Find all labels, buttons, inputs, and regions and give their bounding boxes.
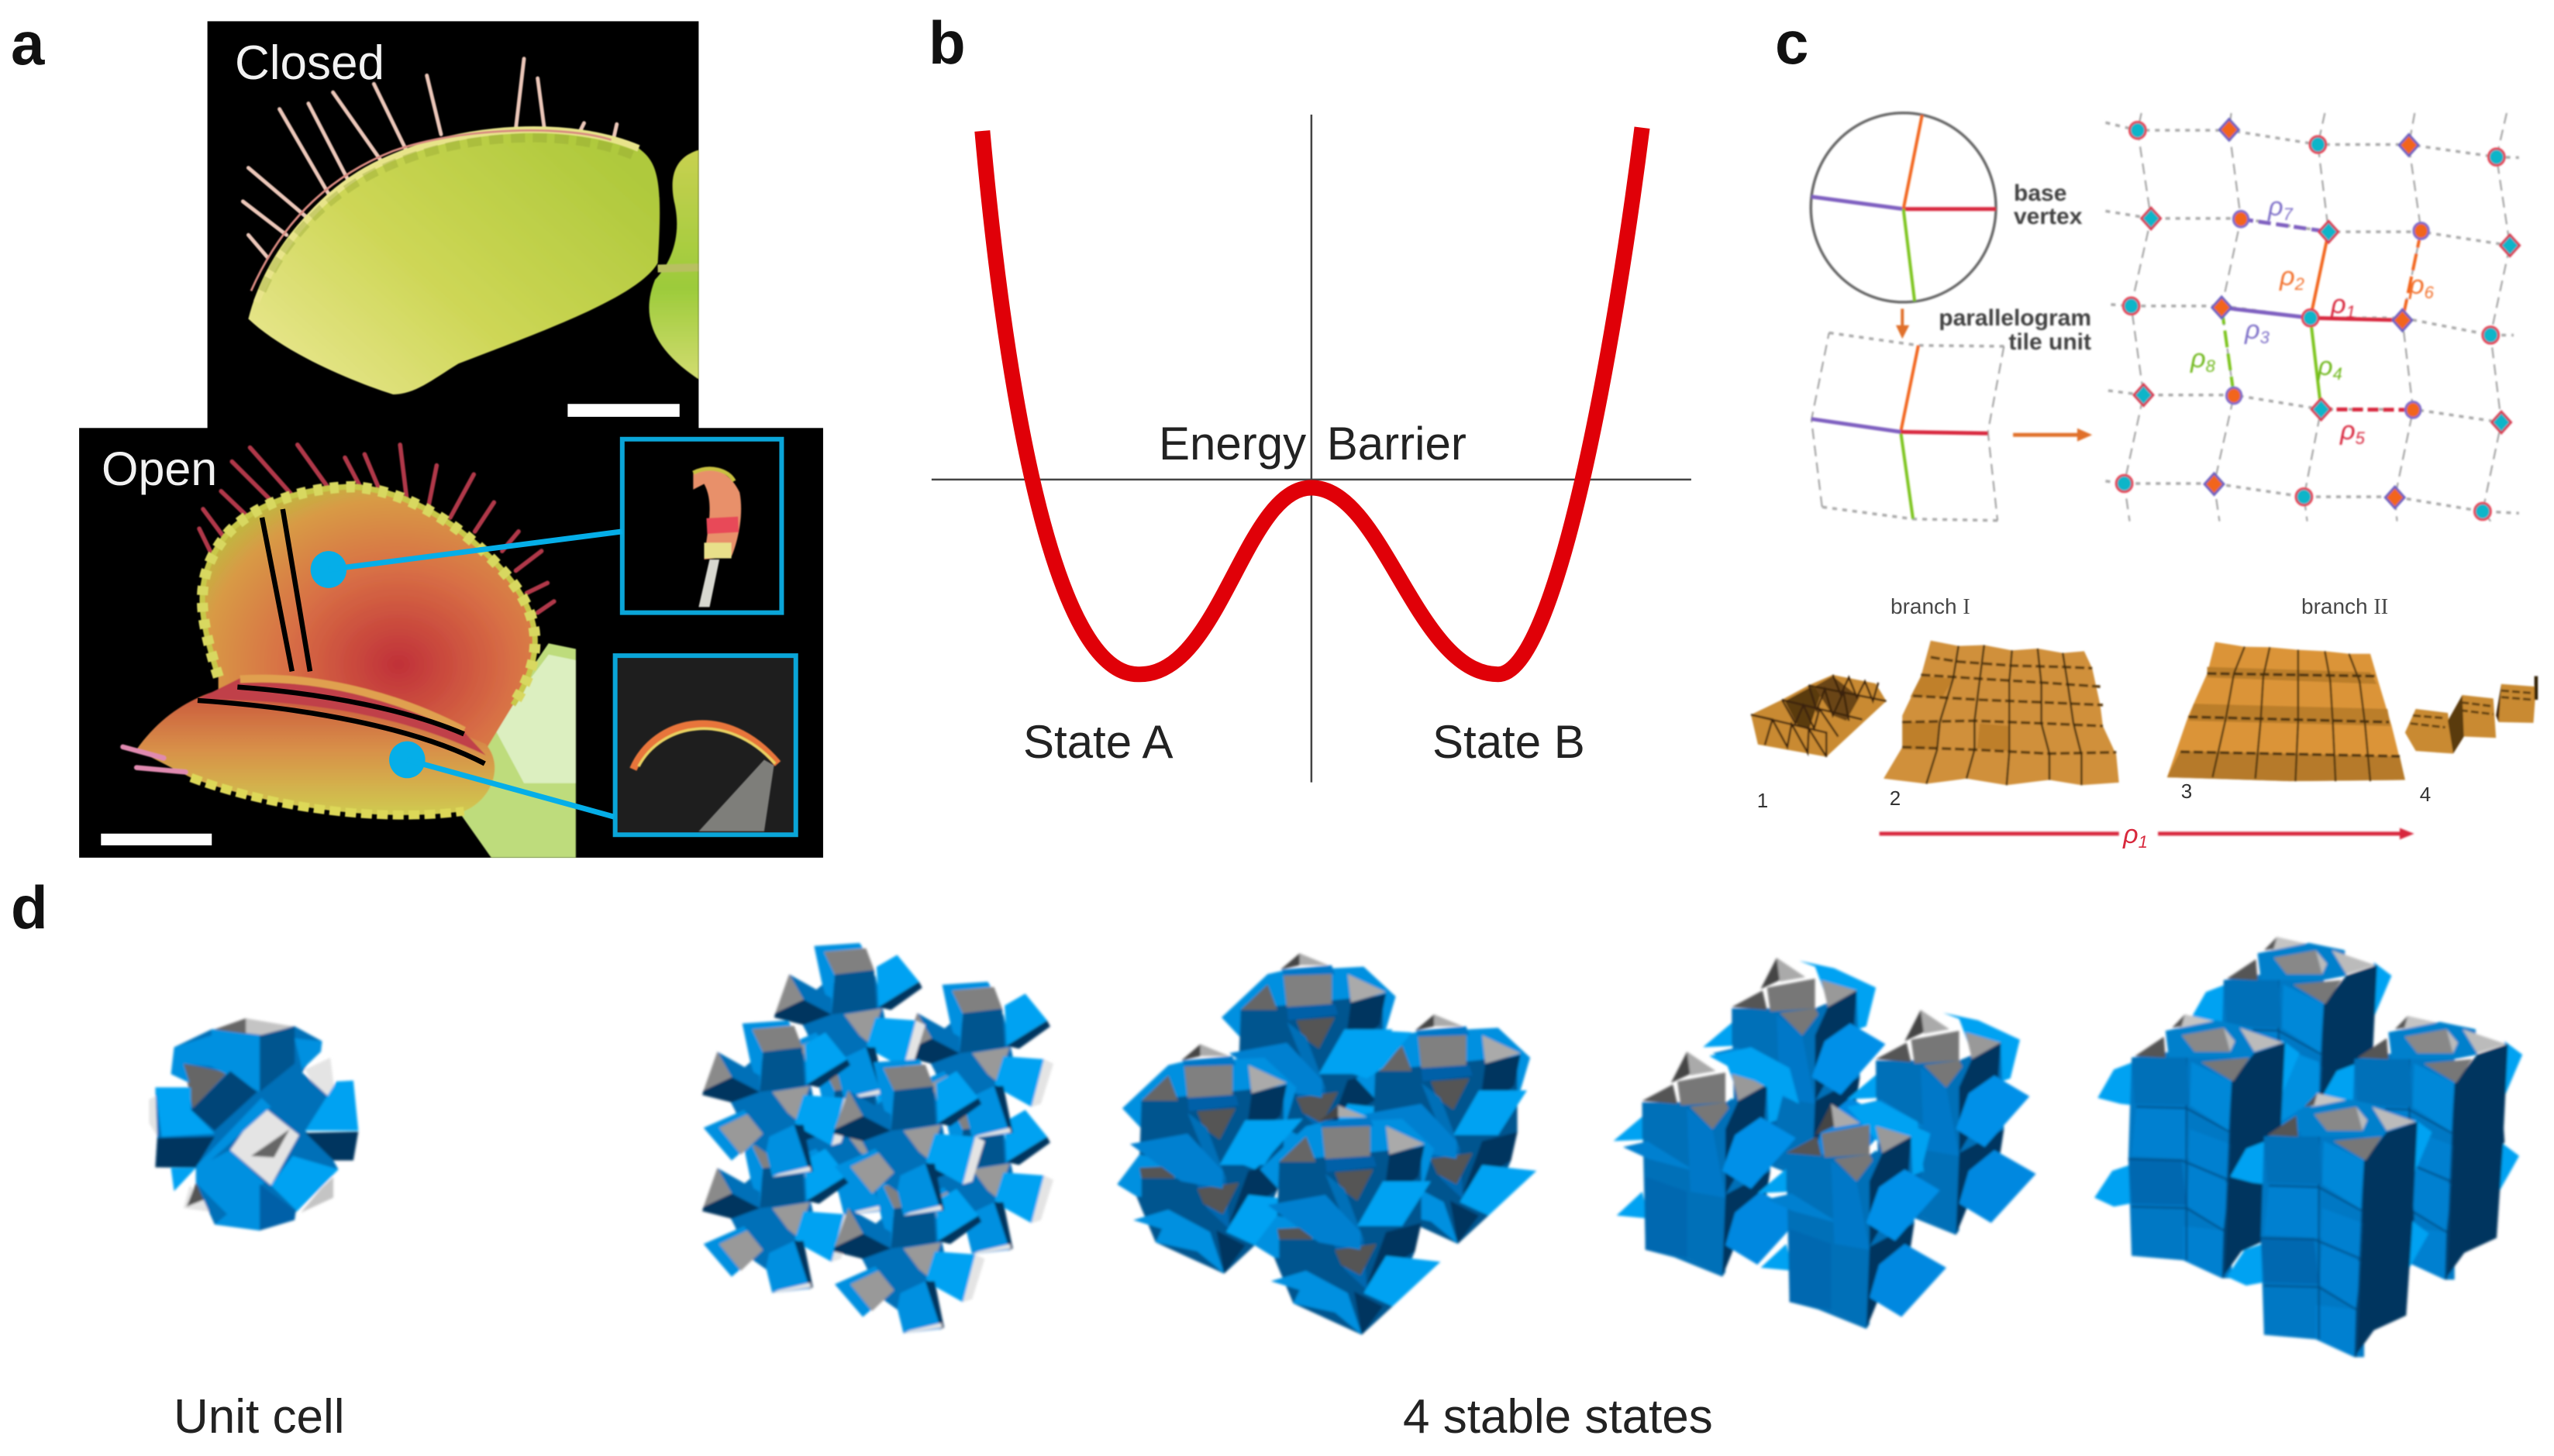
label: Energy Barrier: Energy Barrier (1159, 418, 1467, 470)
label: Closed: Closed (235, 36, 384, 90)
state 4: compact lattice (2094, 937, 2522, 1357)
panel c: base vertex and tessellation (1751, 113, 2536, 839)
lattice parameter labels: 1 (2346, 302, 2356, 322)
callout: blue pointer to upper inset (311, 532, 622, 588)
lattice parameter labels: 5 (2356, 429, 2366, 448)
panel label: c: c (1775, 9, 1808, 77)
label: rho1: 1 (2139, 832, 2148, 852)
lattice parameter labels: ρ (2331, 290, 2346, 319)
state 3: lattice (1613, 958, 2036, 1329)
label: rho1: ρ (2123, 820, 2139, 849)
label: parallelogram tile unit: tile unit (2008, 329, 2091, 355)
axes (932, 115, 1691, 783)
lattice parameter labels: ρ (2340, 416, 2356, 446)
unit cell (149, 1018, 358, 1231)
arrow: circle to tile (1896, 308, 1909, 339)
lattice parameter labels: ρ (2280, 262, 2295, 291)
diagram: parallelogram tile unit (1811, 332, 2004, 521)
panel d: origami metamaterial (149, 937, 2522, 1357)
panel a: venus flytrap photographs (79, 21, 823, 858)
lattice parameter labels: ρ (2268, 192, 2283, 222)
state 1: expanded lattice (702, 943, 1053, 1334)
lattice parameter labels: ρ (2245, 315, 2260, 345)
callout: blue pointer to lower inset (389, 742, 614, 817)
lattice parameter labels: 8 (2206, 356, 2216, 376)
lattice parameter labels: 4 (2333, 364, 2342, 384)
panel label: d: d (11, 873, 48, 941)
diagram: base vertex circle (1811, 113, 1996, 302)
lattice parameter labels: ρ (2409, 270, 2425, 300)
panel label: a: a (11, 9, 45, 77)
state number 1: 1 (1757, 789, 1768, 812)
lattice parameter labels (2190, 192, 2435, 448)
state number 2: 2 (1890, 787, 1901, 810)
panel label: b: b (929, 9, 966, 77)
lattice parameter labels: 3 (2260, 328, 2270, 347)
sheet 2: branch I unfolded state (1884, 641, 2119, 785)
label: 4 stable states: 4 stable states (1403, 1390, 1713, 1444)
scale bar (101, 834, 212, 845)
sheet 4: folded stair state (2405, 676, 2536, 754)
sheet 1: folded zigzag state (1751, 675, 1887, 757)
photo: closed flytrap (208, 21, 698, 429)
inset: curved cross-section of upper lobe (622, 439, 781, 613)
label: State B: State B (1432, 716, 1585, 768)
inset: curved cross-section of lower lobe (615, 656, 796, 835)
label: base vertex: vertex (2014, 204, 2083, 229)
state number 3: 3 (2181, 780, 2192, 803)
state 2: lattice (1117, 953, 1536, 1335)
arrow: tile to lattice (2013, 429, 2092, 442)
label: Open: Open (102, 442, 217, 495)
panel b: energy landscape chart (932, 115, 1691, 783)
lattice parameter labels: 2 (2294, 274, 2304, 294)
lattice parameter labels: 7 (2283, 205, 2294, 224)
lattice parameter labels: ρ (2318, 352, 2333, 381)
arrow: rho1 direction (1880, 828, 2414, 839)
double-well energy curve (982, 128, 1642, 674)
label: parallelogram tile unit: parallelogram (1939, 305, 2091, 331)
label: branch II: branch II (2301, 594, 2388, 619)
label: base vertex: base (2014, 181, 2066, 206)
lattice parameter labels: ρ (2190, 344, 2206, 373)
label: branch I: branch I (1891, 594, 1970, 619)
sheet 3: branch II unfolded state (2167, 642, 2405, 781)
diagram: tessellated lattice (2105, 113, 2520, 521)
label: Unit cell: Unit cell (174, 1390, 345, 1444)
photo: open flytrap (79, 428, 823, 858)
midrib annotation lines (198, 509, 484, 764)
scale bar (567, 404, 680, 417)
lattice parameter labels: 6 (2425, 283, 2435, 302)
state number 4: 4 (2420, 783, 2431, 806)
label: State A: State A (1023, 716, 1173, 768)
